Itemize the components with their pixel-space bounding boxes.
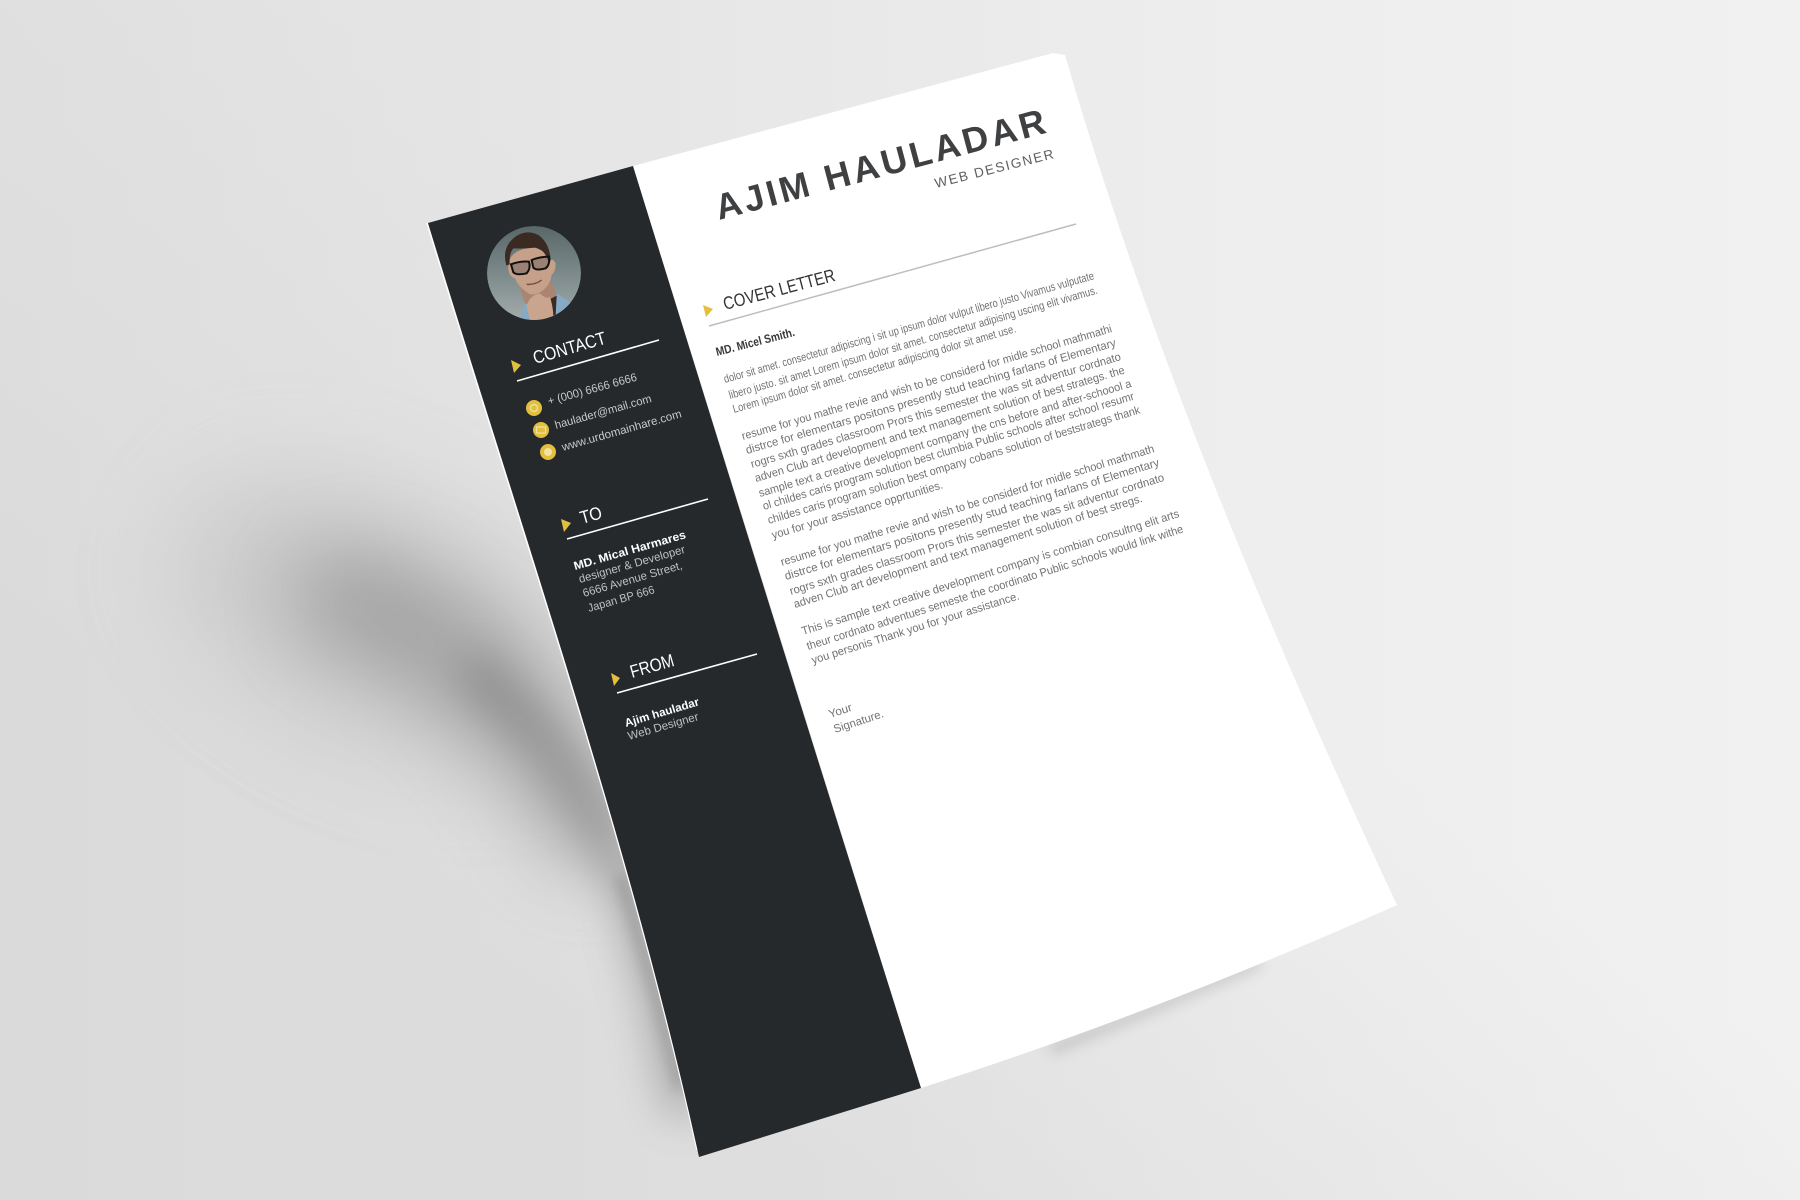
paper shadow: bottom right (1050, 962, 1260, 1050)
contact list (526, 372, 683, 460)
from heading (611, 650, 757, 693)
to address: MD. Mical Harmares (573, 529, 687, 573)
to address: Japan BP 666 (587, 584, 656, 615)
paragraph 3: adven Club art development and text management solution of best stregs. (792, 493, 1144, 611)
paragraph 2: distrce for elementars positons presently stud teaching farlans of Elementary (744, 337, 1118, 457)
neck (520, 280, 556, 304)
paragraph 2: ol childes caris program solution best clumbia Public schools after school resumr (761, 391, 1136, 513)
mouth (527, 280, 542, 284)
from marker (611, 673, 620, 686)
paragraph 1: Lorem ipsum dolor sit amet. consectetur adipiscing dolor sit amet use. (732, 323, 1017, 416)
dark sidebar (428, 166, 921, 1157)
portrait photo (487, 226, 581, 322)
paragraph 2: childes caris program solution best ompany cobans solution of beststrategs thank (766, 404, 1142, 527)
paragraph 3: distrce for elementars positons presently stud teaching farlans of Elementary (783, 457, 1161, 583)
paragraph 2: adven Club art development and text management solution of best strategs. the (753, 365, 1126, 485)
contact marker (511, 360, 521, 373)
to address (573, 529, 687, 615)
cover letter heading (703, 265, 837, 317)
letter body (723, 270, 1185, 667)
face (508, 248, 556, 294)
paragraph 4: theur cordnato adventues semeste the coordinato Public schools would link withe (805, 524, 1185, 653)
header rule (709, 224, 1076, 326)
paragraph 3: rogrs sxth grades classroom Prors this semester the was sit adventur cordnato (788, 472, 1166, 598)
paragraph 2 (740, 323, 1142, 542)
job title: WEB DESIGNER (933, 146, 1055, 191)
paragraph 4: This is sample text creative development company is combian consultng elit arts (800, 508, 1181, 638)
from details: Web Designer (627, 711, 700, 743)
name heading: AJIM HAULADAR (711, 101, 1050, 228)
paper shadow: left (143, 432, 682, 1100)
website: www.urdomainhare.com (560, 408, 683, 454)
to marker (561, 519, 571, 532)
signature: Signature. (832, 708, 885, 736)
glasses (511, 257, 549, 274)
icon: web (540, 444, 556, 460)
icon: mail (533, 422, 549, 438)
paragraph 2: resume for you mathe revie and wish to be considerd for midle school mathmathi (740, 323, 1113, 443)
from heading: FROM (628, 650, 676, 682)
hand (527, 293, 553, 322)
paragraph 3: resume for you mathe revie and wish to be considerd for midle school mathmath (779, 443, 1156, 569)
paragraph 2: rogrs sxth grades classroom Prors this semester the was sit adventur cordnato (749, 351, 1122, 471)
to heading (561, 499, 708, 539)
phone number: + (000) 6666 6666 (547, 372, 638, 408)
paragraph 4: you personis Thank you for your assistance. (810, 591, 1021, 667)
to heading: TO (578, 503, 604, 528)
heading marker (703, 305, 713, 317)
paragraph 1: libero justo. sit amet Lorem ipsum dolor sit amet. consectetur adipising uscing elit vivamus. (728, 285, 1099, 402)
undershirt (550, 296, 557, 316)
contact heading: CONTACT (531, 328, 608, 368)
email address: haulader@mail.com (554, 393, 653, 432)
paragraph 2: you for your assistance opprtunities. (770, 480, 944, 542)
shirt (520, 294, 570, 320)
contact heading (511, 328, 659, 381)
paragraph 2: sample text a creative development company the cns before and after-schoool a (757, 378, 1133, 500)
icon: phone (526, 400, 542, 416)
salutation: MD. Micel Smith. (714, 325, 796, 359)
paper sheet (633, 53, 1397, 1088)
paragraph 1: dolor sit amet. consectetur adipiscing i sit up ipsum dolor vulput libero justo Vivamus vulputate (723, 270, 1095, 386)
to address: designer & Developer (578, 544, 687, 586)
cover letter heading: COVER LETTER (721, 265, 837, 314)
hair (505, 232, 551, 266)
from details: Ajim hauladar (623, 696, 701, 730)
left edge sliver (427, 223, 697, 1150)
signature: Your (827, 702, 854, 721)
to address: 6666 Avenue Street, (582, 560, 684, 600)
from details (623, 696, 701, 743)
